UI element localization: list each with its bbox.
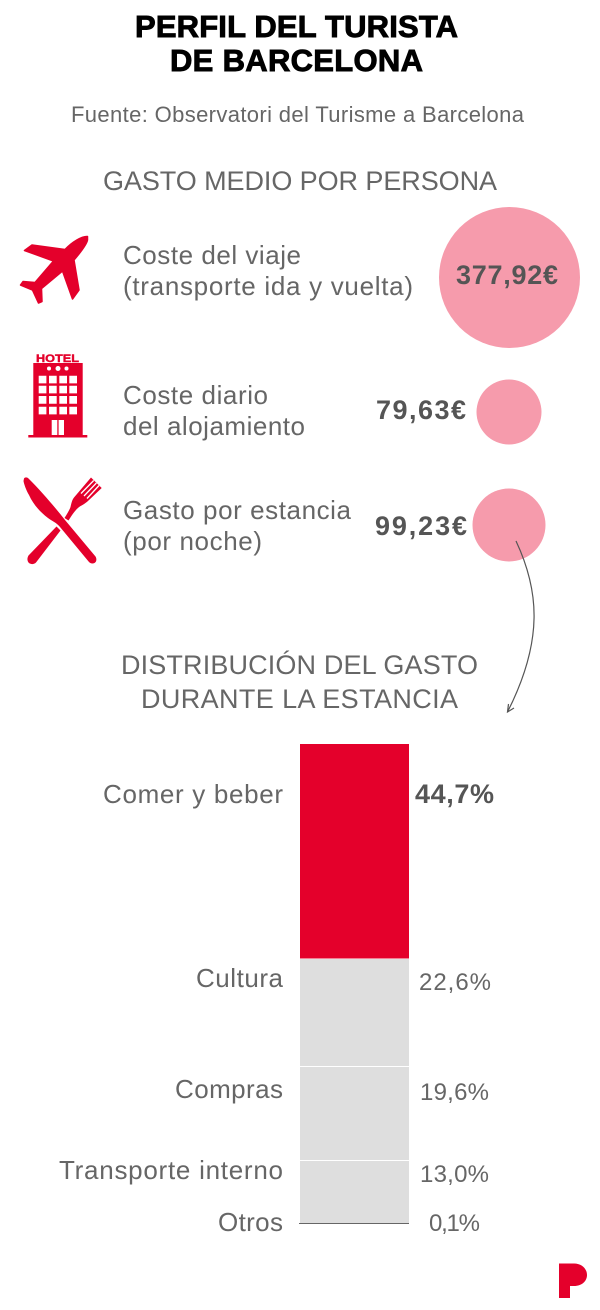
icon: knife and fork [24, 477, 102, 564]
segment: comer y beber: Comer y beber [103, 779, 283, 809]
icon: airplane [20, 236, 88, 303]
arrow [508, 541, 534, 712]
segment: cultura: 22,6% [419, 969, 491, 996]
row: coste diario [28, 353, 542, 444]
label: (por noche) [123, 526, 262, 556]
label: (transporte ida y vuelta) [123, 271, 413, 301]
value: 79,63€ [376, 395, 466, 425]
label [123, 240, 413, 301]
row: gasto por estancia [24, 477, 546, 564]
segment: otros: Otros [218, 1207, 283, 1237]
segment: compras: 19,6% [420, 1079, 489, 1106]
logo [559, 1264, 587, 1298]
icon: hotel: HOTEL [36, 353, 79, 365]
segment: transporte interno: Transporte interno [59, 1155, 283, 1185]
value: 377,92€ [456, 260, 558, 290]
segment: compras: Compras [175, 1074, 283, 1104]
bubble: 99,23 [472, 488, 546, 562]
stacked bar chart [59, 744, 494, 1237]
label [123, 495, 352, 556]
label: Coste diario [123, 380, 268, 410]
segment: comer y beber [103, 744, 494, 958]
value: 99,23€ [375, 511, 467, 541]
title: DE BARCELONA [170, 43, 423, 78]
label [123, 380, 305, 441]
segment: transporte interno [59, 1155, 489, 1223]
heading: distribución [121, 649, 478, 714]
heading: distribución: DISTRIBUCIÓN DEL GASTO [121, 649, 478, 680]
heading: gasto medio: GASTO MEDIO POR PERSONA [103, 166, 497, 196]
segment: comer y beber: 44,7% [415, 779, 494, 809]
segment: cultura: Cultura [196, 963, 284, 993]
title: PERFIL DEL TURISTA [135, 9, 458, 44]
segment: transporte interno: 13,0% [420, 1161, 489, 1188]
bubble: 377,92 [439, 207, 580, 348]
label: del alojamiento [123, 411, 305, 441]
row: coste del viaje [20, 207, 580, 348]
label: Coste del viaje [123, 240, 301, 270]
title [135, 9, 458, 78]
bubble: 79,63 [476, 380, 542, 444]
label: Gasto por estancia [123, 495, 352, 525]
segment: compras [175, 1067, 489, 1160]
source line: Fuente: Observatori del Turisme a Barcelona [71, 102, 525, 127]
segment: otros [218, 1207, 480, 1237]
segment: cultura [196, 959, 491, 1066]
segment: otros: 0,1% [429, 1210, 480, 1237]
icon: hotel [28, 353, 87, 438]
heading: distribución: DURANTE LA ESTANCIA [141, 684, 458, 714]
